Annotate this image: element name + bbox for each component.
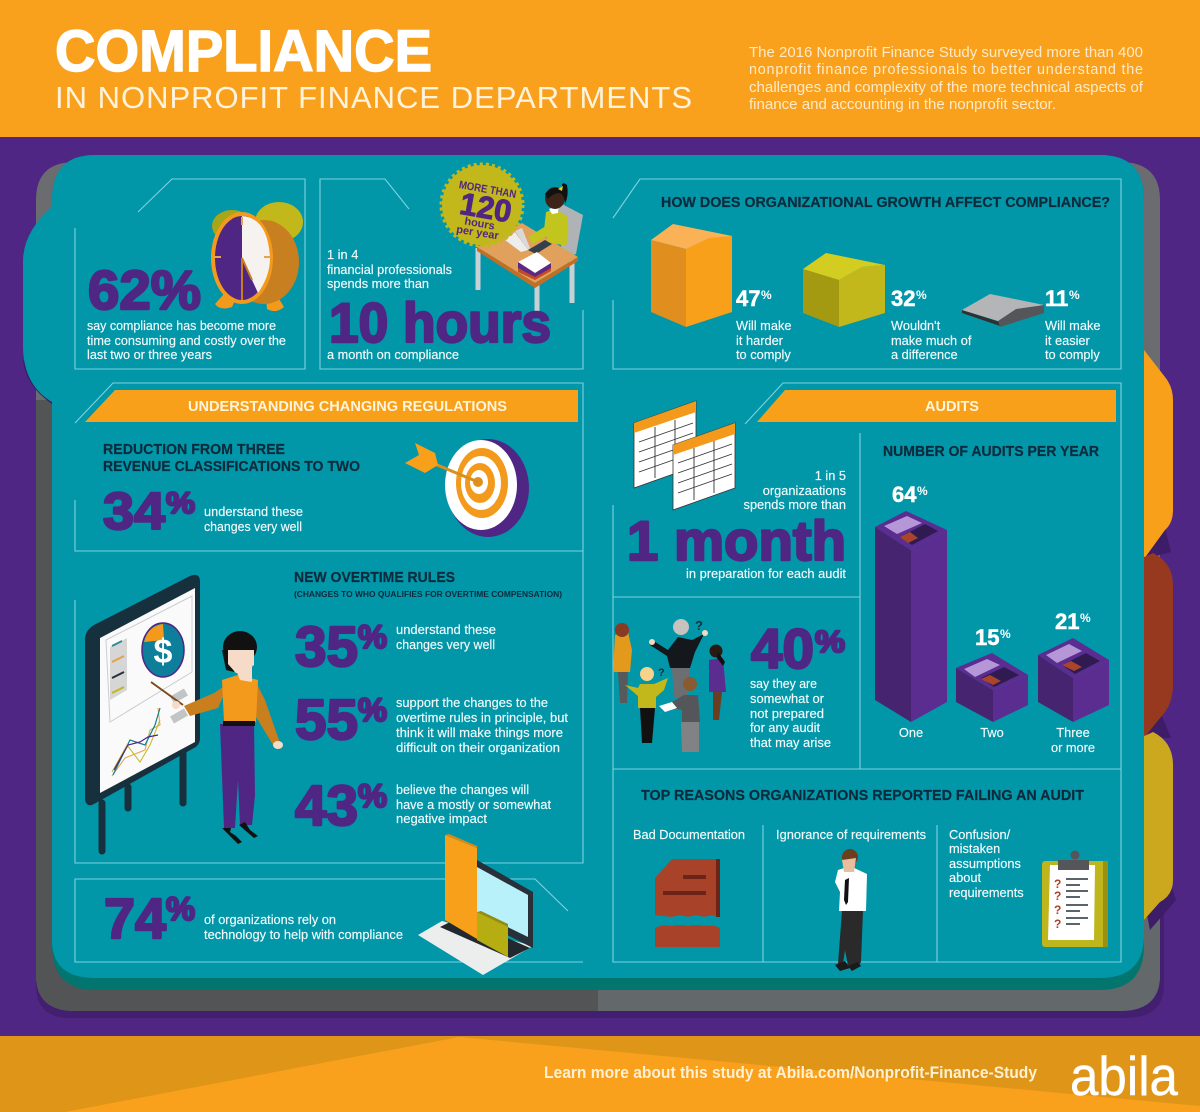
icon: laptop with bars — [418, 834, 533, 975]
badge: 120 hours per year — [442, 165, 522, 245]
heading band: audits: AUDITS — [925, 399, 979, 415]
bar: two — [956, 625, 1028, 740]
text: 62% caption — [87, 318, 286, 362]
stat: 10 hours: 10 hours — [329, 291, 551, 354]
bar: three or more — [1038, 609, 1109, 755]
tab: yellow — [1140, 732, 1173, 920]
folder backing with tabs — [23, 162, 1176, 1018]
text: in preparation: in preparation for each audit — [686, 566, 846, 581]
text: 62% caption: last two or three years — [87, 347, 212, 362]
chart: 11% block — [962, 294, 1044, 327]
text: 34% caption: changes very well — [204, 519, 302, 534]
stat: 32%: % — [916, 288, 927, 302]
intro paragraph: challenges and complexity of the more technical aspects of — [749, 80, 1144, 96]
stat: 62%: 62% — [88, 259, 201, 321]
illustration: presentation board — [85, 575, 200, 851]
text: 1 in 5: 1 in 5 — [815, 468, 846, 483]
stat: 47% — [736, 286, 791, 362]
stat: 43% — [295, 774, 387, 838]
bar: two: % — [1000, 627, 1011, 641]
badge: 120 hours per year: 120 — [457, 186, 514, 229]
panel: understanding changing regulations — [75, 383, 583, 551]
text: 40% caption: for any audit — [750, 720, 820, 735]
icon: clipboard: ? — [1054, 889, 1061, 903]
text: 55% caption: overtime rules in principle, but — [396, 710, 568, 725]
panel: audits — [613, 383, 1121, 971]
text: 62% caption: say compliance has become more — [87, 318, 276, 333]
reason: confusion: about — [949, 870, 981, 885]
bar: three or more: 21 — [1055, 609, 1079, 634]
icon: target with arrow — [405, 439, 529, 537]
heading: new overtime rules — [294, 570, 562, 599]
stat: 47%: it harder — [736, 333, 784, 348]
heading: top reasons: TOP REASONS ORGANIZATIONS REPORTED FAILING AN AUDIT — [641, 788, 1084, 804]
stat: 40%: % — [815, 624, 845, 659]
icon: spreadsheet pages — [634, 401, 735, 510]
text: 1 in 4: 1 in 4 — [327, 247, 358, 262]
bar: one: One — [899, 725, 923, 740]
text: 55% caption: difficult on their organization — [396, 740, 560, 755]
stat: 47%: % — [761, 288, 772, 302]
illustration: confused group — [613, 618, 726, 752]
text: 55% caption: think it will make things more — [396, 725, 563, 740]
person: purple woman — [709, 644, 726, 720]
illustration: man with hand on head — [835, 849, 867, 971]
heading band — [85, 390, 578, 422]
heading: new overtime rules: NEW OVERTIME RULES — [294, 570, 455, 586]
text: 55% caption: support the changes to the — [396, 695, 548, 710]
text: 43% caption: believe the changes will — [396, 782, 529, 797]
stat: 32%: a difference — [891, 347, 958, 362]
text: 62% caption: time consuming and costly over the — [87, 333, 286, 348]
heading: reduction — [103, 442, 360, 475]
logo: abila: abila — [1070, 1045, 1178, 1107]
text: 43% caption: negative impact — [396, 811, 487, 826]
stat: 47%: 47 — [736, 286, 760, 311]
panel: 62 percent — [75, 179, 305, 369]
person: grey man — [659, 677, 700, 752]
reason: ignorance — [776, 827, 926, 971]
text: 1 in 5: spends more than — [744, 497, 846, 512]
stat: 11%: % — [1069, 288, 1080, 302]
title: COMPLIANCE — [55, 19, 432, 84]
reason: ignorance: Ignorance of requirements — [776, 827, 926, 842]
chart: 32% block — [803, 253, 885, 327]
bar: two: Two — [980, 725, 1004, 740]
stat: 35% — [295, 615, 387, 679]
bar: three or more: Three — [1056, 725, 1090, 740]
text: 43% caption — [396, 782, 551, 826]
reason: confusion: assumptions — [949, 856, 1021, 871]
text: 40% caption: say they are — [750, 676, 817, 691]
reason: confusion: requirements — [949, 885, 1024, 900]
icon: clipboard: ? — [1054, 903, 1061, 917]
bar: three or more: % — [1080, 611, 1091, 625]
stat: 55% — [295, 688, 387, 752]
text: 40% caption: that may arise — [750, 735, 831, 750]
text: 43% caption: have a mostly or somewhat — [396, 797, 551, 812]
illustration: presenter — [151, 631, 283, 844]
text: 1 in 4: financial professionals — [327, 262, 452, 277]
stat: 35%: 35 — [295, 615, 358, 679]
heading band: audits — [757, 390, 1116, 422]
stat: 40%: 40 — [751, 617, 814, 680]
tab: orange — [1140, 346, 1173, 559]
tab: brown — [1140, 553, 1173, 738]
reason: confusion — [949, 827, 1108, 947]
stat: 55%: 55 — [295, 688, 358, 752]
text: a month on compliance: a month on compliance — [327, 347, 459, 362]
header banner — [0, 0, 1200, 137]
text: 40% caption — [750, 676, 831, 750]
text: 40% caption: somewhat or — [750, 691, 825, 706]
subtitle: IN NONPROFIT FINANCE DEPARTMENTS — [55, 80, 692, 115]
heading: new overtime rules: (CHANGES TO WHO QUALIFIES FOR OVERTIME COMPENSATION) — [294, 589, 562, 599]
heading: growth: HOW DOES ORGANIZATIONAL GROWTH AFFECT COMPLIANCE? — [661, 195, 1110, 211]
badge: 120 hours per year: per year — [455, 224, 500, 242]
stat: 32%: Wouldn't — [891, 318, 941, 333]
icon: dollar circle: $ — [154, 633, 173, 671]
badge: 120 hours per year: MORE THAN — [458, 179, 517, 201]
stat: 47%: to comply — [736, 347, 791, 362]
bar: one: 64 — [892, 482, 917, 507]
text: 40% caption: not prepared — [750, 706, 824, 721]
heading: number of audits: NUMBER OF AUDITS PER YEAR — [883, 444, 1100, 460]
icon: dollar circle — [142, 623, 184, 677]
stat: 11%: Will make — [1045, 318, 1100, 333]
text: 1 in 4 — [327, 247, 452, 291]
heading band: UNDERSTANDING CHANGING REGULATIONS — [188, 399, 507, 415]
stat: 11%: 11 — [1045, 286, 1068, 311]
panel: new overtime rules — [75, 551, 583, 863]
text: 1 in 5 — [744, 468, 846, 512]
intro paragraph: The 2016 Nonprofit Finance Study surveyed more than 400 — [749, 45, 1143, 61]
footer band — [0, 1036, 1200, 1112]
intro paragraph: nonprofit finance professionals to better understand the — [749, 62, 1143, 78]
text: 74% caption: of organizations rely on — [204, 912, 336, 927]
chart: 47% block — [651, 224, 732, 327]
reason: confusion: mistaken — [949, 841, 1000, 856]
panel: 10 hours — [320, 165, 583, 369]
text: 1 in 5: organizaations — [763, 483, 846, 498]
icon: clipboard — [1042, 850, 1108, 947]
reason: bad documentation — [633, 827, 745, 947]
person: yellow woman: ? — [658, 667, 665, 679]
bar: two: 15 — [975, 625, 999, 650]
stat: 32% — [891, 286, 972, 362]
heading: reduction: REDUCTION FROM THREE — [103, 442, 285, 458]
stat: 11%: it easier — [1045, 333, 1091, 348]
heading: reduction: REVENUE CLASSIFICATIONS TO TWO — [103, 459, 360, 475]
stat: 43%: 43 — [295, 774, 358, 838]
text: 1 in 4: spends more than — [327, 276, 429, 291]
chart: audits per year bars — [875, 482, 1109, 755]
icon: torn document — [655, 859, 720, 947]
reason: bad documentation: Bad Documentation — [633, 827, 745, 842]
stat: 35%: % — [358, 619, 387, 655]
badge: 120 hours per year: hours — [463, 215, 496, 233]
stat: 34% — [103, 483, 195, 541]
stat: 74%: % — [166, 891, 195, 927]
shadow under left bulge — [23, 360, 52, 404]
bar: three or more: or more — [1051, 740, 1095, 755]
text: 34% caption — [204, 504, 303, 534]
stat: 74% — [104, 887, 195, 951]
main teal panel — [23, 155, 1144, 990]
reason: confusion: Confusion/ — [949, 827, 1011, 842]
icon: alarm clock — [211, 202, 303, 311]
intro paragraph — [749, 45, 1144, 113]
stat: 11%: to comply — [1045, 347, 1100, 362]
stat: 1 month: 1 month — [627, 509, 846, 572]
stat: 34%: % — [166, 487, 195, 520]
text: 55% caption — [396, 695, 568, 755]
stat: 43%: % — [358, 778, 387, 814]
stat: 11% — [1045, 286, 1100, 362]
text: 35% caption: changes very well — [396, 637, 495, 652]
text: 74% caption: technology to help with compliance — [204, 927, 403, 942]
icon: clipboard: ? — [1054, 877, 1061, 891]
text: learn more: Learn more about this study at Abila.com/Nonprofit-Finance-Study — [544, 1064, 1038, 1082]
text: 74% caption — [204, 912, 403, 942]
intro paragraph: finance and accounting in the nonprofit sector. — [749, 97, 1056, 113]
text: 34% caption: understand these — [204, 504, 303, 519]
text: 35% caption — [396, 622, 496, 652]
icon: desk and worker — [477, 183, 583, 312]
text: 35% caption: understand these — [396, 622, 496, 637]
panel: organizational growth — [613, 179, 1121, 369]
person: orange woman — [613, 623, 632, 703]
panel: technology 74 percent — [75, 834, 583, 975]
stat: 40% — [751, 617, 845, 680]
person: older man: ? — [695, 618, 703, 633]
stat: 32%: make much of — [891, 333, 972, 348]
stat: 34%: 34 — [103, 483, 165, 541]
stat: 47%: Will make — [736, 318, 791, 333]
bar: one: % — [917, 484, 928, 498]
stat: 32%: 32 — [891, 286, 915, 311]
bar: one — [875, 482, 947, 740]
icon: clipboard: ? — [1054, 917, 1061, 931]
stat: 55%: % — [358, 692, 387, 728]
stat: 74%: 74 — [104, 887, 166, 951]
